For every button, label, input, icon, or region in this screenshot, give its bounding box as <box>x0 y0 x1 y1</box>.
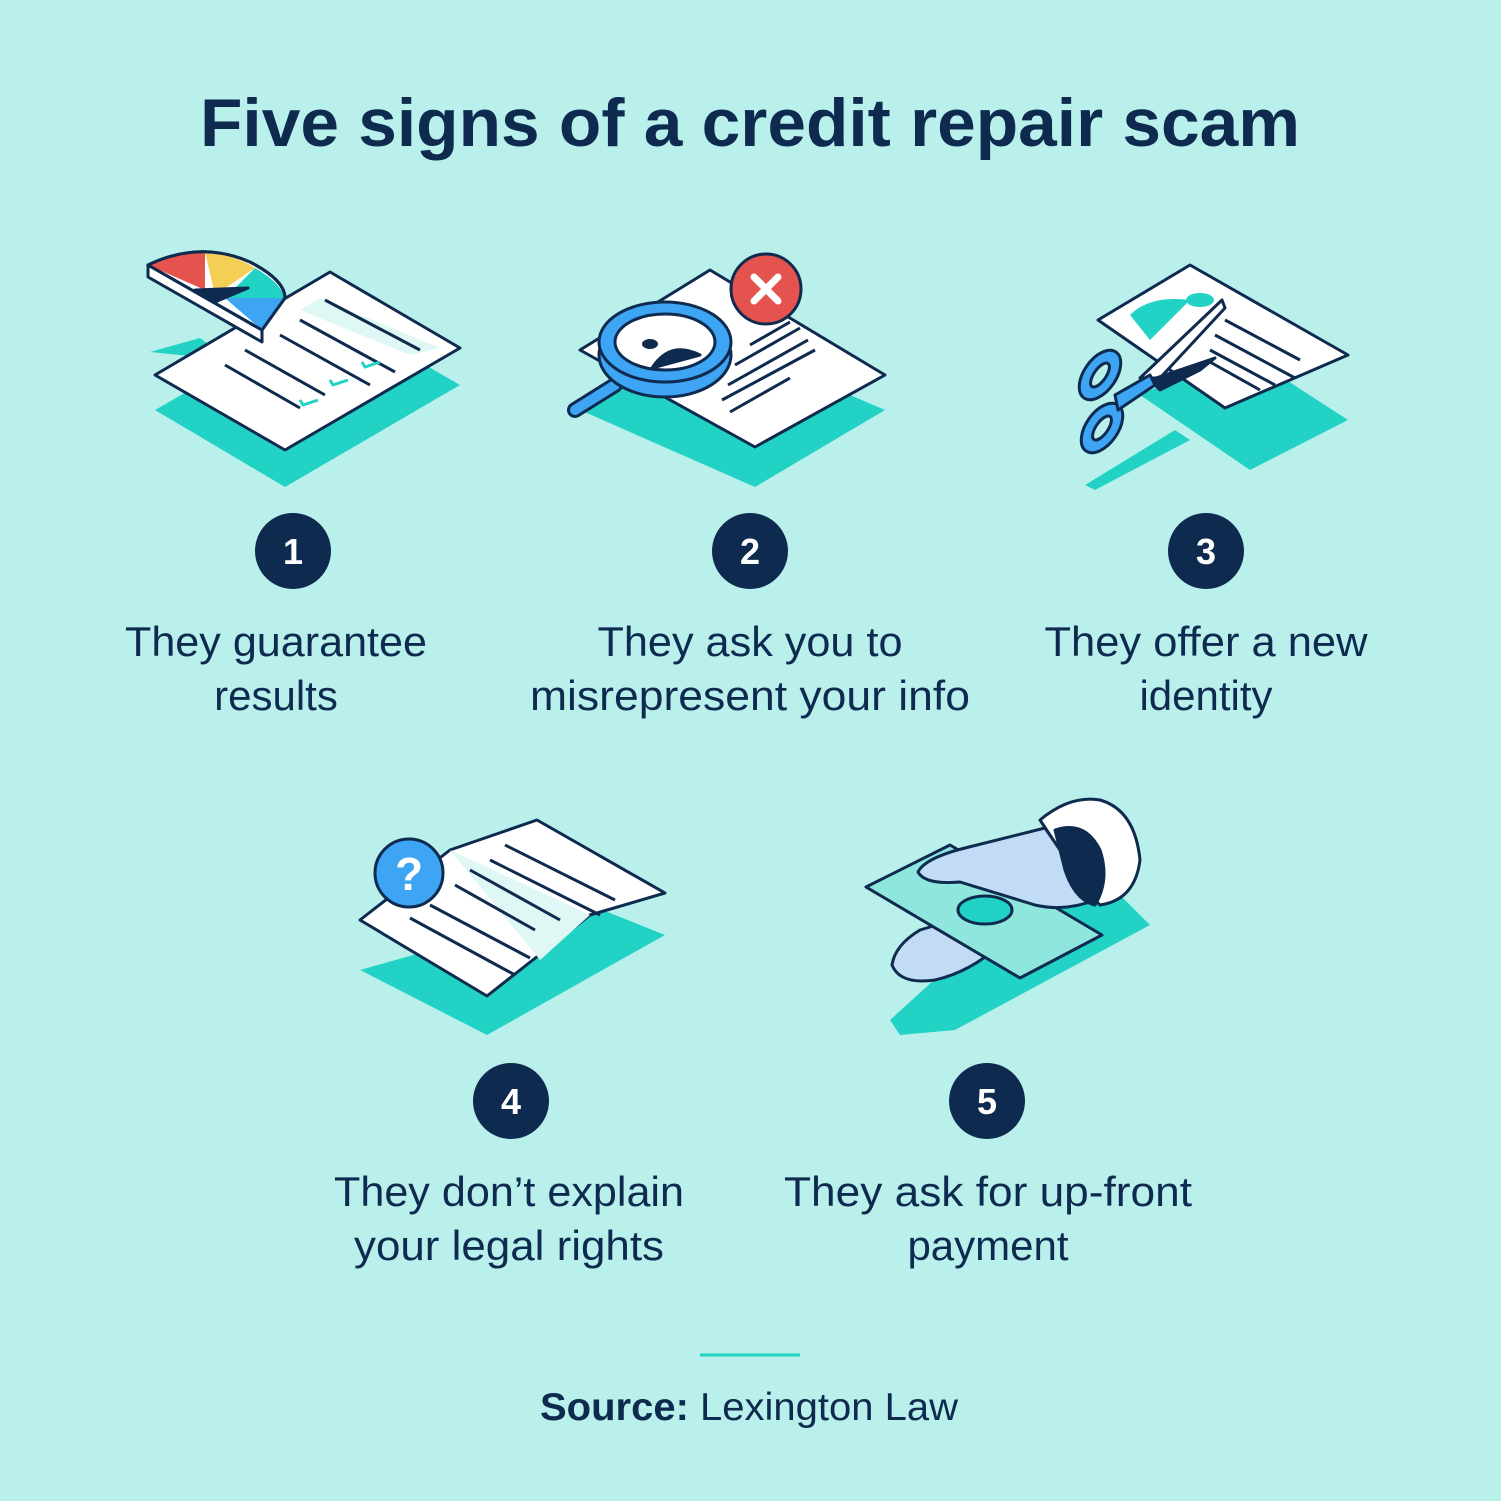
number badges: 4 <box>501 1081 521 1122</box>
labels: They guarantee <box>125 618 427 665</box>
labels: They ask you to <box>598 618 902 665</box>
labels: They ask for up-front <box>784 1168 1192 1215</box>
icon: folded document with question: ? <box>395 848 423 900</box>
number badges: 3 <box>1196 531 1216 572</box>
labels: payment <box>907 1222 1069 1269</box>
icon: magnifier over document <box>575 254 885 487</box>
number badges: 1 <box>283 531 303 572</box>
labels: results <box>214 672 338 719</box>
source: Source: Lexington Law <box>540 1386 959 1429</box>
number badges: 5 <box>977 1081 997 1122</box>
icon: credit report with gauge <box>148 252 460 487</box>
labels: your legal rights <box>354 1222 664 1269</box>
icon: hand with money <box>866 799 1150 1035</box>
labels <box>125 618 1368 1269</box>
labels: They don’t explain <box>334 1168 684 1215</box>
icon: folded document with question <box>360 820 665 1035</box>
number badges <box>255 513 1244 1139</box>
number badges: 2 <box>740 531 760 572</box>
labels: identity <box>1139 672 1273 719</box>
labels: misrepresent your info <box>530 672 970 719</box>
icon: scissors cutting document <box>1071 265 1348 490</box>
labels: They offer a new <box>1044 618 1368 665</box>
title: Five signs of a credit repair scam <box>200 85 1300 161</box>
